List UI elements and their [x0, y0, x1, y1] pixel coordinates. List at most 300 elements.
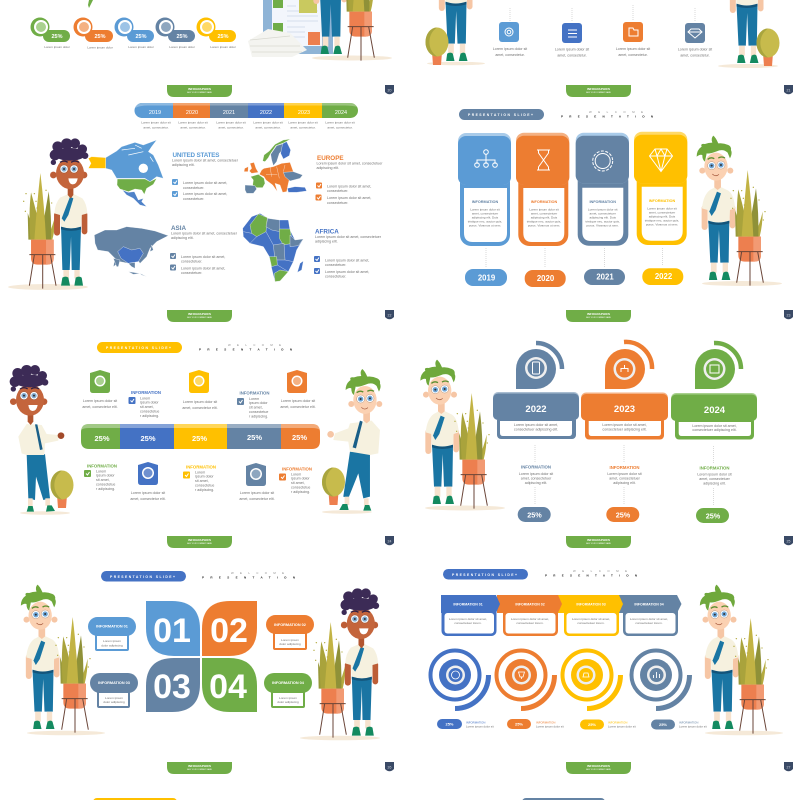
info box 03: INFORMATION 03 — [98, 681, 130, 685]
year pills: 2020 — [537, 274, 555, 283]
info text 2023: INFORMATION — [610, 465, 640, 470]
text: africa — [314, 228, 382, 278]
stat orange: INFORMATION — [536, 720, 555, 724]
plant right — [313, 622, 349, 738]
footer tab: INFOGRAPHICS — [587, 87, 610, 91]
stat slate — [651, 720, 707, 730]
year timeline: amet, consectetur. — [255, 126, 281, 130]
text: united states — [172, 152, 239, 201]
welcome heading: PRESENTATION — [561, 114, 653, 118]
segmented bar: 25% — [292, 433, 307, 442]
information block orange: sit amet, — [291, 481, 305, 485]
footer tab: ADD YOUR COMPANY NAME — [586, 542, 612, 545]
information block royal — [128, 390, 161, 418]
ground — [705, 731, 783, 735]
card orange: INFORMATION — [531, 200, 558, 204]
page badge — [385, 536, 394, 545]
card orange: adipiscing elit. Duis — [531, 216, 558, 220]
header card 2022: Lorem ipsum dolor sit amet, — [514, 423, 558, 427]
stat yellow: INFORMATION — [608, 720, 627, 724]
petal 01 — [146, 601, 200, 656]
stat orange: Lorem ipsum dolor sit — [536, 724, 564, 728]
welcome heading — [561, 110, 653, 118]
info box 01 — [88, 617, 136, 651]
slide 23: four cards — [458, 109, 793, 322]
footer tab: INFOGRAPHICS — [587, 764, 610, 768]
card yellow: amet, consectetuer — [649, 210, 675, 214]
footer tab: INFOGRAPHICS — [188, 538, 211, 542]
year timeline: 2019 — [149, 110, 161, 116]
information block orange: consectetue — [291, 486, 310, 490]
footer tab: ADD YOUR COMPANY NAME — [187, 316, 213, 319]
info box 02 — [266, 615, 314, 650]
stat slate: Lorem ipsum dolor sit — [679, 724, 707, 728]
card blue: adipiscing elit. Duis — [472, 216, 499, 220]
information block yellow — [183, 464, 216, 492]
page badge: 22 — [388, 314, 391, 318]
captions: Lorem ipsum dolor sit — [131, 491, 165, 495]
year timeline: 2022 — [260, 110, 272, 116]
information block orange: INFORMATION — [282, 466, 312, 472]
info text 2023: Lorem ipsum dolor sit — [607, 472, 642, 476]
welcome heading: WELCOME — [573, 569, 627, 573]
year timeline: Lorem ipsum dolor sit — [178, 120, 208, 124]
card orange: Lorem ipsum dolor sit — [529, 208, 559, 212]
information block yellow: r adipiscing. — [195, 488, 214, 492]
info box 04: INFORMATION 04 — [272, 681, 305, 685]
card yellow: Lorem ipsum dolor sit — [647, 206, 677, 210]
page badge: 26 — [388, 766, 391, 770]
footer tab — [566, 310, 631, 322]
text: asia: consectetuer. — [181, 260, 202, 264]
spiral orange — [496, 650, 554, 708]
year timeline: 2023 — [298, 110, 310, 116]
arrow royal: consectetuer lorem. — [454, 621, 482, 625]
arrow slate: consectetuer lorem. — [635, 621, 663, 625]
header card 2024: Lorem ipsum dolor sit amet, — [692, 424, 737, 428]
map: africa — [243, 213, 303, 282]
welcome heading: WELCOME — [589, 110, 643, 114]
stat yellow: Lorem ipsum dolor sit — [608, 724, 636, 728]
year timeline: amet, consectetur. — [290, 126, 316, 130]
captions: amet, consectetur elit. — [182, 406, 218, 410]
captions: amet, consectetur elit. — [280, 405, 316, 409]
plant — [733, 618, 769, 734]
text: asia — [170, 225, 238, 275]
petal 01: 01 — [153, 612, 191, 650]
welcome heading: PRESENTATION — [545, 574, 637, 578]
info text 2023 — [607, 465, 642, 485]
text: europe: consectetuer. — [327, 201, 348, 205]
information block green: consectetue — [96, 482, 115, 486]
step 4 slate — [156, 18, 195, 49]
information block royal: sit amet, — [140, 405, 154, 409]
right cactus — [322, 468, 345, 505]
information block slate: ipsum dolor — [249, 401, 268, 405]
petal 02 — [202, 601, 257, 656]
footer tab — [566, 536, 631, 548]
card slate: tristique nec, auctor quis, — [585, 220, 620, 224]
page badge — [784, 85, 793, 94]
text: asia: Lorem ipsum dolor sit amet, — [181, 255, 225, 259]
page badge: 23 — [787, 314, 790, 318]
footer tab: ADD YOUR COMPANY NAME — [586, 768, 612, 771]
footer tab: ADD YOUR COMPANY NAME — [586, 316, 612, 319]
info text 2022: INFORMATION — [521, 464, 551, 470]
item sliders: amet, consectetur. — [557, 54, 587, 58]
info text 2022: amet, consectetuer — [521, 476, 552, 480]
info box 04: Lorem ipsum — [279, 696, 297, 700]
item diamond — [678, 8, 712, 58]
year timeline: Lorem ipsum dolor sit — [216, 120, 246, 124]
text: africa: Lorem ipsum dolor sit amet, — [325, 258, 369, 262]
stat yellow: 25% — [588, 722, 596, 727]
header card 2022 — [493, 392, 579, 439]
footer tab — [566, 762, 631, 774]
step 3 blue — [114, 18, 154, 49]
page badge — [784, 762, 793, 771]
heading pill — [97, 342, 182, 353]
segmented bar: 25% — [94, 434, 110, 443]
year timeline: 2020 — [186, 110, 198, 116]
information block slate — [237, 390, 270, 418]
captions: Lorem ipsum dolor sit — [281, 399, 315, 403]
character — [420, 360, 459, 504]
footer tab — [566, 85, 631, 97]
welcome heading: PRESENTATION — [199, 348, 292, 352]
text: united states: Lorem ipsum dolor sit amet, — [183, 181, 227, 185]
stat royal: INFORMATION — [466, 720, 485, 724]
information block green: r adipiscing. — [96, 487, 115, 491]
stat yellow — [580, 720, 636, 730]
header card 2024: consectetuer adipiscing elit. — [692, 428, 737, 432]
card yellow — [634, 132, 687, 245]
information block royal: INFORMATION — [131, 390, 161, 395]
item gear: amet, consectetur. — [495, 53, 525, 57]
info box 03 — [90, 673, 138, 708]
item folder — [616, 5, 650, 57]
info box 01: INFORMATION 01 — [96, 624, 128, 628]
footer tab: INFOGRAPHICS — [587, 538, 610, 542]
page badge — [784, 536, 793, 545]
ground right — [300, 736, 380, 740]
text: united states: UNITED STATES — [172, 152, 220, 159]
footer tab — [167, 310, 232, 322]
right character pointing — [327, 369, 382, 511]
arrow orange: Lorem ipsum dolor sit amet, — [511, 617, 549, 621]
information block royal: r adipiscing. — [140, 414, 159, 418]
ground shadow — [312, 56, 392, 60]
slide 21: icon row — [426, 0, 793, 97]
pin 2023 — [605, 342, 652, 389]
step 5 yellow: 25% — [217, 34, 229, 40]
information block yellow: consectetue — [195, 484, 214, 488]
slide 22: world regions — [8, 103, 394, 322]
header card 2024 — [671, 393, 757, 440]
information block yellow: ipsum dolor — [195, 474, 214, 478]
card yellow: tristique nec, auctor quis, — [645, 218, 679, 222]
captions: Lorem ipsum dolor sit — [240, 491, 274, 495]
year timeline: 2021 — [223, 110, 235, 116]
right cactus — [756, 28, 780, 66]
captions: amet, consectetur elit. — [239, 497, 275, 501]
arrow yellow — [558, 595, 623, 636]
captions: Lorem ipsum dolor sit — [83, 399, 117, 403]
step 2 orange — [74, 18, 113, 50]
text: united states: Lorem ipsum dolor sit amet, consectetuer — [172, 158, 239, 162]
step 1 green: Lorem ipsum dolor — [44, 45, 70, 49]
year timeline: Lorem ipsum dolor sit — [325, 120, 355, 124]
text: europe: Lorem ipsum dolor sit amet, — [327, 196, 371, 200]
item sliders: Lorem ipsum dolor sit — [555, 48, 589, 52]
petal 03 — [146, 658, 200, 712]
text: europe: EUROPE — [317, 155, 344, 162]
petal 02: 02 — [210, 612, 248, 650]
information block slate: Lorem — [249, 397, 259, 401]
card blue: Lorem ipsum dolor sit — [470, 208, 500, 212]
plant — [23, 173, 58, 289]
percentage pills — [518, 507, 729, 523]
year pills — [465, 268, 683, 287]
page badge: 27 — [787, 766, 790, 770]
right ground — [322, 510, 372, 514]
text: united states: consectetuer. — [183, 186, 204, 190]
text: united states: adipiscing elit. — [172, 163, 195, 167]
arrow royal — [441, 595, 500, 636]
slide 24: percentage bar — [10, 342, 394, 548]
year timeline: amet, consectetur. — [143, 126, 169, 130]
text: asia: Lorem ipsum dolor sit amet, consectetuer — [171, 232, 238, 236]
year timeline: Lorem ipsum dolor sit — [253, 120, 283, 124]
footer tab: ADD YOUR COMPANY NAME — [586, 91, 612, 94]
year timeline — [134, 103, 358, 130]
next slide pill fragment right — [522, 798, 605, 800]
information block slate: consectetue — [249, 410, 268, 414]
map: europe — [244, 139, 307, 193]
text: africa: AFRICA — [315, 228, 339, 236]
info box 02: INFORMATION 02 — [274, 623, 306, 627]
document illustration — [248, 0, 333, 57]
info text 2024 — [697, 466, 732, 486]
step 2 orange: 25% — [94, 34, 106, 40]
potted plant — [341, 0, 377, 61]
page badge — [784, 310, 793, 319]
info box 02: dolor adipiscing — [279, 642, 301, 646]
step 5 yellow — [196, 18, 236, 49]
card blue: amet, consectetuer — [472, 212, 498, 216]
arrow royal: Lorem ipsum dolor sit amet, — [449, 617, 487, 621]
info text 2022: adipiscing elit. — [525, 481, 547, 485]
information block orange: r adipiscing. — [291, 490, 310, 494]
character legs — [308, 0, 347, 54]
step 4 slate: Lorem ipsum dolor — [169, 45, 195, 49]
item folder: Lorem ipsum dolor sit — [616, 47, 650, 51]
card yellow: purus. Vivamus ut sem. — [646, 222, 678, 226]
map: north america — [88, 140, 163, 207]
page badge: 24 — [388, 540, 391, 544]
information block yellow: Lorem — [195, 470, 205, 474]
welcome heading: WELCOME — [231, 571, 284, 575]
info text 2024: INFORMATION — [700, 466, 730, 470]
information block green — [84, 464, 117, 491]
ground left — [27, 731, 105, 735]
petal 04 — [202, 658, 257, 712]
map: asia — [94, 227, 168, 277]
percentage pills: 25% — [616, 510, 631, 520]
plant — [454, 393, 490, 509]
next slide pill fragment left — [93, 798, 177, 800]
character — [50, 138, 88, 286]
segmented bar: 25% — [192, 434, 207, 443]
card yellow: INFORMATION — [649, 199, 676, 203]
welcome heading: PRESENTATION — [202, 576, 295, 580]
information block green: Lorem — [96, 470, 106, 474]
information block green: ipsum dolor — [96, 474, 115, 478]
year timeline: Lorem ipsum dolor sit — [288, 120, 318, 124]
header card 2024: 2024 — [704, 405, 726, 416]
info text 2023: amet, consectetuer — [609, 476, 641, 480]
information block orange — [279, 466, 312, 494]
left ground — [427, 62, 485, 65]
text: united states: Lorem ipsum dolor sit amet, — [183, 192, 227, 196]
info box 03: Lorem ipsum — [105, 696, 123, 700]
item sliders — [555, 8, 589, 58]
pin 2024 — [695, 343, 741, 389]
arrow slate — [619, 595, 682, 636]
captions — [82, 399, 316, 501]
plant — [730, 170, 766, 286]
information block green: sit amet, — [96, 478, 110, 482]
footer tab — [167, 85, 232, 97]
heading pill: PRESENTATION SLIDE+ — [106, 346, 171, 350]
text: europe: Lorem ipsum dolor sit amet, — [327, 184, 371, 188]
year timeline: Lorem ipsum dolor sit — [141, 120, 171, 124]
card blue: tristique nec, auctor quis, — [468, 220, 502, 224]
info text 2023: adipiscing elit. — [613, 481, 636, 485]
information block slate: r adipiscing. — [249, 414, 268, 418]
information block royal: consectetue — [140, 410, 159, 414]
segmented bar: 25% — [140, 434, 156, 443]
arrow orange: INFORMATION 02 — [515, 602, 545, 606]
segmented bar: 25% — [247, 433, 262, 442]
year timeline: amet, consectetur. — [218, 126, 244, 130]
header card 2023: 2023 — [614, 404, 635, 415]
information block royal: ipsum dolor — [140, 400, 159, 404]
arrow orange — [497, 595, 562, 636]
pin 2022 — [516, 343, 562, 389]
step 1 green: 25% — [51, 34, 63, 40]
header card 2022: consectetuer adipiscing elit. — [514, 428, 558, 432]
step 3 blue: Lorem ipsum dolor — [128, 45, 154, 49]
info text 2022: Lorem ipsum dolor sit — [519, 472, 553, 476]
info text 2024: amet, consectetuer — [699, 477, 731, 481]
character — [697, 136, 735, 280]
header card 2023 — [581, 392, 668, 440]
text: europe: consectetuer. — [327, 189, 348, 193]
slide 25: three year pins — [420, 342, 793, 548]
footer tab: INFOGRAPHICS — [188, 312, 211, 316]
ground — [702, 281, 782, 286]
card blue — [458, 133, 511, 246]
card slate: Lorem ipsum dolor sit — [588, 208, 618, 212]
arrow yellow: consectetuer lorem. — [577, 621, 605, 625]
text: africa: consectetuer. — [325, 274, 346, 278]
text: europe — [316, 155, 383, 205]
step 2 orange: Lorem ipsum dolor — [87, 46, 113, 50]
heading pill: PRESENTATION SLIDE+ — [452, 573, 517, 577]
left ground — [20, 511, 70, 515]
step 3 blue: 25% — [135, 34, 147, 40]
spiral yellow — [562, 650, 620, 708]
info box 02: Lorem ipsum — [281, 638, 299, 642]
percentage pills: 25% — [527, 510, 542, 520]
item diamond: Lorem ipsum dolor sit — [678, 48, 712, 52]
info box 01: dolor adipiscing — [101, 644, 123, 648]
information block slate: sit amet, — [249, 406, 263, 410]
text: united states: consectetuer. — [183, 197, 204, 201]
information block orange: ipsum dolor — [291, 476, 310, 480]
arrow yellow: Lorem ipsum dolor sit amet, — [572, 617, 610, 621]
info text 2022 — [519, 464, 553, 485]
card orange — [516, 133, 569, 246]
decorative leaf fragment — [88, 0, 93, 8]
heading pill — [459, 109, 544, 120]
heading pill: PRESENTATION SLIDE+ — [110, 575, 175, 579]
card blue: purus. Vivamus ut sem. — [469, 224, 501, 228]
information block green: INFORMATION — [87, 464, 117, 468]
year pills: 2022 — [655, 272, 673, 281]
page badge: 21 — [787, 88, 790, 92]
page badge: 25 — [787, 540, 790, 544]
page badge — [385, 762, 394, 771]
header card 2023: Lorem ipsum dolor sit amet, — [602, 423, 647, 427]
plant left — [55, 617, 91, 733]
text: africa: Lorem ipsum dolor sit amet, consectetuer — [315, 235, 382, 239]
text: asia: adipiscing elit. — [171, 236, 194, 240]
percentage pills: 25% — [706, 512, 721, 520]
text: europe: Lorem ipsum dolor sit amet, consectetuer — [316, 162, 383, 166]
captions: Lorem ipsum dolor sit — [183, 400, 217, 404]
card orange: amet, consectetuer — [531, 212, 557, 216]
slide 20: percentage steps — [30, 0, 394, 97]
text: asia: Lorem ipsum dolor sit amet, — [181, 266, 225, 270]
text: africa: adipiscing elit. — [315, 240, 338, 244]
text: asia: ASIA — [171, 225, 186, 232]
hex icons top — [90, 370, 307, 393]
page badge: 20 — [388, 88, 391, 92]
card yellow: adipiscing elit. Duis — [649, 214, 676, 218]
character left — [21, 585, 59, 729]
stat royal: Lorem ipsum dolor sit — [466, 724, 494, 728]
info box 04: dolor adipiscing — [277, 700, 299, 704]
item gear — [493, 8, 527, 57]
arrow slate: Lorem ipsum dolor sit amet, — [630, 617, 668, 621]
right legs — [725, 0, 763, 63]
stat orange — [507, 719, 564, 729]
hex icons bottom — [138, 462, 266, 486]
info text 2024: Lorem ipsum dolor sit — [697, 472, 732, 476]
card slate: amet, consectetuer — [590, 212, 616, 216]
arrow slate: INFORMATION 04 — [634, 602, 664, 606]
year timeline: 2024 — [335, 110, 347, 116]
footer tab — [167, 536, 232, 548]
character right — [341, 588, 379, 736]
captions: amet, consectetur elit. — [82, 405, 118, 409]
spiral slate — [632, 650, 690, 708]
page badge — [385, 85, 394, 94]
information block royal: Lorem — [140, 396, 150, 400]
stat royal — [437, 719, 494, 729]
